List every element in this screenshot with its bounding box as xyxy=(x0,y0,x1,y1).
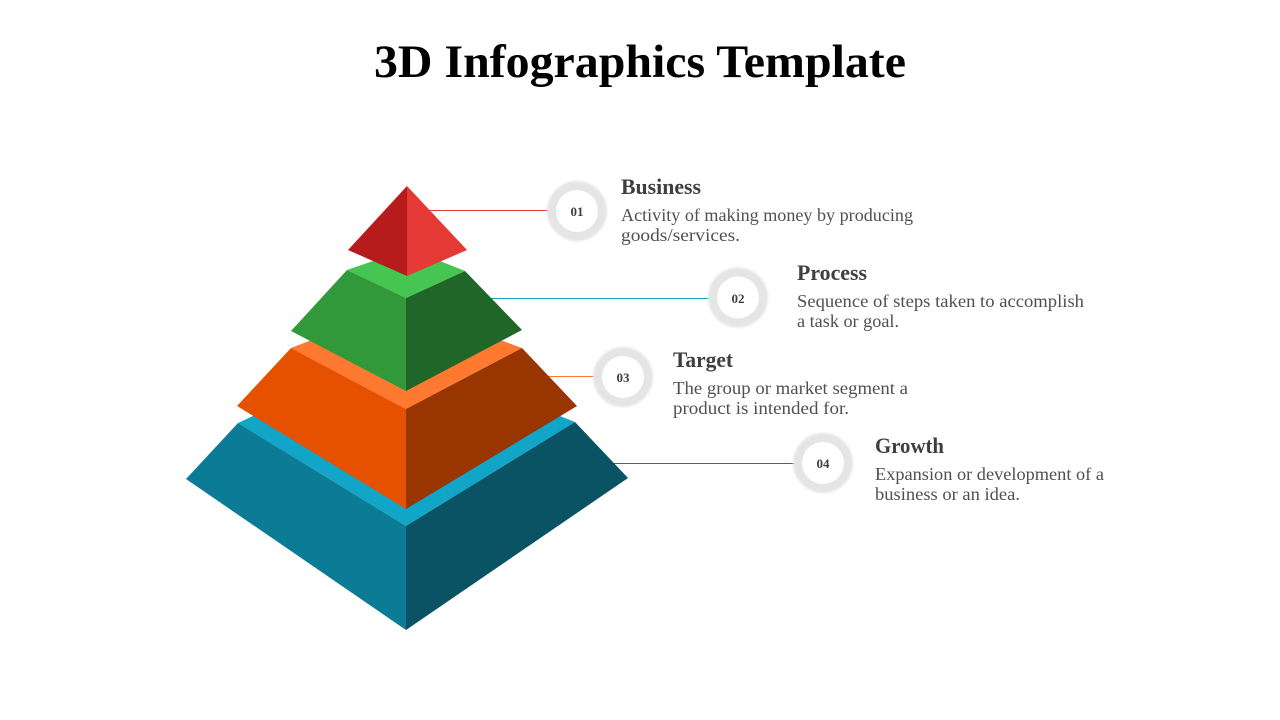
tier 4: growth xyxy=(186,416,628,630)
text block: target: The group or market segment a xyxy=(673,378,908,398)
connector line: process xyxy=(490,298,710,300)
badge 03 xyxy=(593,347,653,407)
badge 03: 03 xyxy=(616,370,630,385)
connector line: target xyxy=(548,376,596,378)
tier 1: business xyxy=(348,186,467,276)
title: 3D Infographics Template xyxy=(374,36,906,88)
text block: target xyxy=(673,347,908,418)
text block: business xyxy=(621,174,913,245)
text block: growth xyxy=(875,433,1104,504)
text block: growth: business or an idea. xyxy=(875,484,1020,504)
badge 02 xyxy=(708,268,768,328)
badge 04: 04 xyxy=(816,456,830,471)
text block: target: product is intended for. xyxy=(673,398,849,418)
badge 04 xyxy=(793,433,853,493)
text block: target: Target xyxy=(673,347,734,372)
text block: process: a task or goal. xyxy=(797,311,899,331)
text block: process: Sequence of steps taken to accomplish xyxy=(797,291,1084,311)
tier 3: target xyxy=(237,341,577,509)
text block: process xyxy=(797,260,1084,331)
text block: business: Activity of making money by producing xyxy=(621,205,913,225)
connector line: business xyxy=(428,210,550,212)
pyramid xyxy=(186,186,628,630)
text block: business: Business xyxy=(621,174,701,199)
badge 02: 02 xyxy=(732,291,744,306)
text block: growth: Growth xyxy=(875,433,944,458)
badge 01 xyxy=(547,181,607,241)
text block: process: Process xyxy=(797,260,867,285)
tier 2: process xyxy=(291,261,522,391)
text block: growth: Expansion or development of a xyxy=(875,464,1104,484)
text block: business: goods/services. xyxy=(621,225,740,245)
badge 01: 01 xyxy=(570,204,584,219)
connector line: growth xyxy=(614,462,795,464)
